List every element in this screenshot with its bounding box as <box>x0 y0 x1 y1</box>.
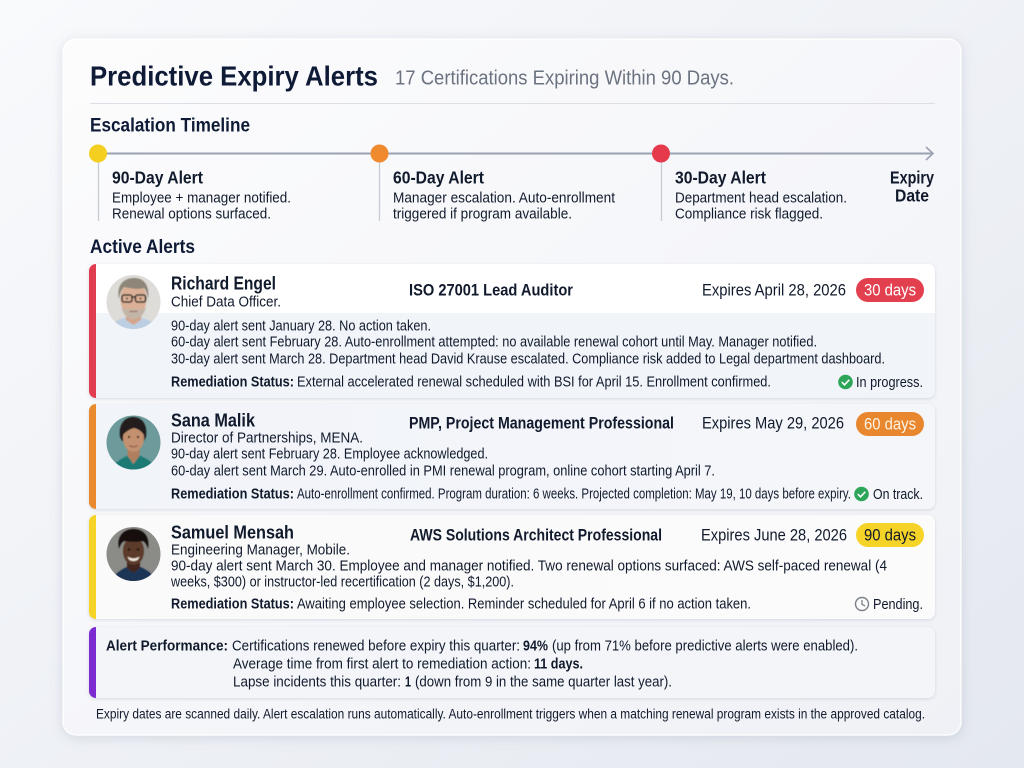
remediation status <box>171 486 851 502</box>
step: 60-day alert: triggered if program available. <box>393 206 572 222</box>
role: Chief Data Officer. <box>171 294 281 310</box>
alert history: 60-day alert sent March 29. Auto-enrolled in PMI renewal program, online cohort starting April 7. <box>171 464 715 480</box>
name: Samuel Mensah <box>171 522 294 542</box>
name: Sana Malik <box>171 410 256 430</box>
icon: portrait Sana Malik <box>106 416 160 470</box>
alert history <box>171 318 885 368</box>
marker: 30-day <box>652 144 670 162</box>
expiry date: Expires June 28, 2026 <box>701 526 847 544</box>
step: 90-day alert: 90-Day Alert <box>112 168 203 188</box>
alert history: 90-day alert sent March 30. Employee and manager notified. Two renewal options surfaced: AWS self-paced renewal (4 <box>171 558 887 574</box>
certification: AWS Solutions Architect Professional <box>410 526 662 544</box>
status: on track <box>854 486 923 503</box>
step: 90-day alert <box>112 168 291 222</box>
certification: PMP, Project Management Professional <box>409 414 674 432</box>
alert history: 60-day alert sent February 28. Auto-enrollment attempted: no available renewal cohort until May. Manager notified. <box>171 334 817 350</box>
step: 30-day alert: Compliance risk flagged. <box>675 206 823 222</box>
icon: portrait Samuel Mensah <box>106 527 160 581</box>
metric: renewal rate: Certifications renewed before expiry this quarter: <box>232 638 520 654</box>
metric: lapse incidents <box>233 674 672 690</box>
escalation timeline <box>89 144 934 222</box>
metric: lapse incidents: Lapse incidents this quarter: <box>233 674 401 690</box>
step: expiry date: Expiry <box>890 168 934 188</box>
badge: 90 days <box>856 523 924 547</box>
badge: 30 days <box>856 278 924 302</box>
status: pending <box>856 596 923 613</box>
step: 60-day alert: Manager escalation. Auto-enrollment <box>393 190 616 206</box>
icon: portrait Richard Engel <box>106 274 161 332</box>
badge: 60 days: 60 days <box>864 416 916 434</box>
step: 60-day alert <box>393 168 616 222</box>
remediation status: Auto-enrollment confirmed. Program duration: 6 weeks. Projected completion: May 19, 10 days before expiry. <box>297 486 851 502</box>
name: Richard Engel <box>171 272 276 294</box>
panel: alert performance <box>89 627 935 698</box>
remediation status: Remediation Status: <box>171 374 294 390</box>
certification: ISO 27001 Lead Auditor <box>409 282 574 300</box>
heading: active alerts: Active Alerts <box>90 236 195 258</box>
alert history: 90-day alert sent January 28. No action taken. <box>171 318 431 334</box>
status: in progress <box>838 374 923 391</box>
panel: Richard Engel alert <box>89 264 935 398</box>
footnote: Expiry dates are scanned daily. Alert escalation runs automatically. Auto-enrollment triggers when a matching renewal program exists in the approved catalog. <box>96 706 925 722</box>
metric: renewal rate: (up from 71% before predictive alerts were enabled). <box>552 638 858 654</box>
alert history <box>171 446 715 480</box>
step: expiry date <box>890 168 934 206</box>
remediation status: Remediation Status: <box>171 486 294 502</box>
heading: escalation timeline: Escalation Timeline <box>90 114 250 136</box>
alert history: 30-day alert sent March 28. Department head David Krause escalated. Compliance risk added to Legal department dashboard. <box>171 352 885 368</box>
title: Predictive Expiry Alerts <box>90 60 378 92</box>
remediation status: Remediation Status: <box>171 596 294 612</box>
badge: 90 days: 90 days <box>864 526 916 544</box>
expiry date: Expires April 28, 2026 <box>702 282 846 300</box>
arrow: timeline axis <box>98 147 933 160</box>
badge: 60 days <box>856 412 924 436</box>
step: 60-day alert: 60-Day Alert <box>393 168 484 188</box>
metric: renewal rate: 94% <box>523 638 548 654</box>
remediation status: Awaiting employee selection. Reminder scheduled for April 6 if no action taken. <box>297 596 751 612</box>
step: 90-day alert: Employee + manager notified. <box>112 190 291 206</box>
panel: Samuel Mensah alert <box>89 515 935 619</box>
step: 30-day alert: 30-Day Alert <box>675 168 766 188</box>
marker: 90-day <box>89 144 107 162</box>
alert history: 90-day alert sent February 28. Employee acknowledged. <box>171 446 488 462</box>
metric: lapse incidents: (down from 9 in the same quarter last year). <box>415 674 672 690</box>
step: 30-day alert <box>675 168 847 222</box>
role: Director of Partnerships, MENA. <box>171 430 363 446</box>
metric: renewal rate <box>232 638 858 654</box>
label: Alert Performance: <box>106 638 228 654</box>
remediation status: External accelerated renewal scheduled with BSI for April 15. Enrollment confirmed. <box>297 374 771 390</box>
status: on track: On track. <box>873 486 923 503</box>
metric: lapse incidents: 1 <box>405 674 411 690</box>
status: in progress: In progress. <box>856 374 923 391</box>
status: pending: Pending. <box>873 596 923 613</box>
step: 30-day alert: Department head escalation. <box>675 190 847 206</box>
badge: 30 days: 30 days <box>864 282 916 300</box>
panel: Sana Malik alert <box>89 404 935 509</box>
expiry date: Expires May 29, 2026 <box>702 414 844 432</box>
alert history: weeks, $300) or instructor-led recertification (2 days, $1,200). <box>170 574 514 590</box>
subtitle: 17 Certifications Expiring Within 90 Days. <box>395 66 734 90</box>
main card <box>63 39 961 735</box>
metric: time to remediation: 11 days. <box>534 656 583 672</box>
marker: 60-day <box>370 144 388 162</box>
role: Engineering Manager, Mobile. <box>171 542 350 558</box>
step: expiry date: Date <box>895 186 929 206</box>
metric: time to remediation: Average time from first alert to remediation action: <box>233 656 531 672</box>
step: 90-day alert: Renewal options surfaced. <box>112 206 271 222</box>
alert history <box>170 558 887 590</box>
